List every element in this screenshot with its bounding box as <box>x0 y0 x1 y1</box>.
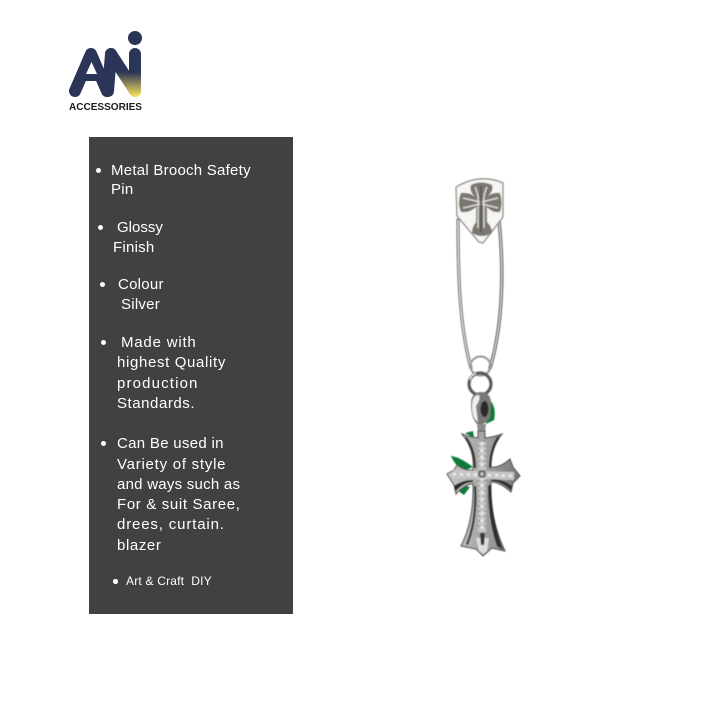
feature: quality standards: Made with <box>121 334 197 351</box>
feature: glossy finish: Glossy <box>117 219 163 236</box>
pin wires <box>458 220 502 368</box>
panel: product features <box>89 137 293 614</box>
product image: safety pin with cross pendant <box>446 178 522 557</box>
feature: variety of uses <box>101 435 241 554</box>
feature: variety of uses: Variety of style <box>117 456 226 473</box>
cross pendant <box>447 431 520 556</box>
bail <box>471 392 491 424</box>
feature: metal brooch safety pin: Pin <box>111 181 133 198</box>
rings <box>469 356 491 395</box>
feature: quality standards: production <box>117 375 199 392</box>
pin head shield <box>456 179 503 243</box>
feature: glossy finish: Finish <box>113 239 155 256</box>
logo: ANi accessories: ACCESSORIES <box>69 102 142 113</box>
feature: variety of uses: Can Be used in <box>117 435 224 452</box>
feature: variety of uses: drees, curtain. <box>117 516 225 533</box>
feature: variety of uses: For & suit Saree, <box>117 496 241 513</box>
feature: art and craft: Art & Craft DIY <box>126 574 212 588</box>
feature: colour silver: Colour <box>118 276 164 293</box>
feature: colour silver: Silver <box>121 296 160 313</box>
green enamel backing <box>451 398 516 495</box>
feature: metal brooch safety pin <box>96 162 251 198</box>
feature: variety of uses: and ways such as <box>117 476 240 493</box>
feature: quality standards: highest Quality <box>117 354 226 371</box>
cross sparkle inlay <box>453 442 514 532</box>
feature: quality standards: Standards. <box>117 395 195 412</box>
cross shadows <box>454 436 512 550</box>
feature: glossy finish <box>98 219 163 256</box>
shield cross <box>459 182 502 236</box>
feature: variety of uses: blazer <box>117 537 161 554</box>
feature: quality standards <box>101 334 226 412</box>
logo: ANi accessories <box>69 31 142 113</box>
feature: colour silver <box>100 276 164 313</box>
feature: metal brooch safety pin: Metal Brooch Safety <box>111 162 251 179</box>
